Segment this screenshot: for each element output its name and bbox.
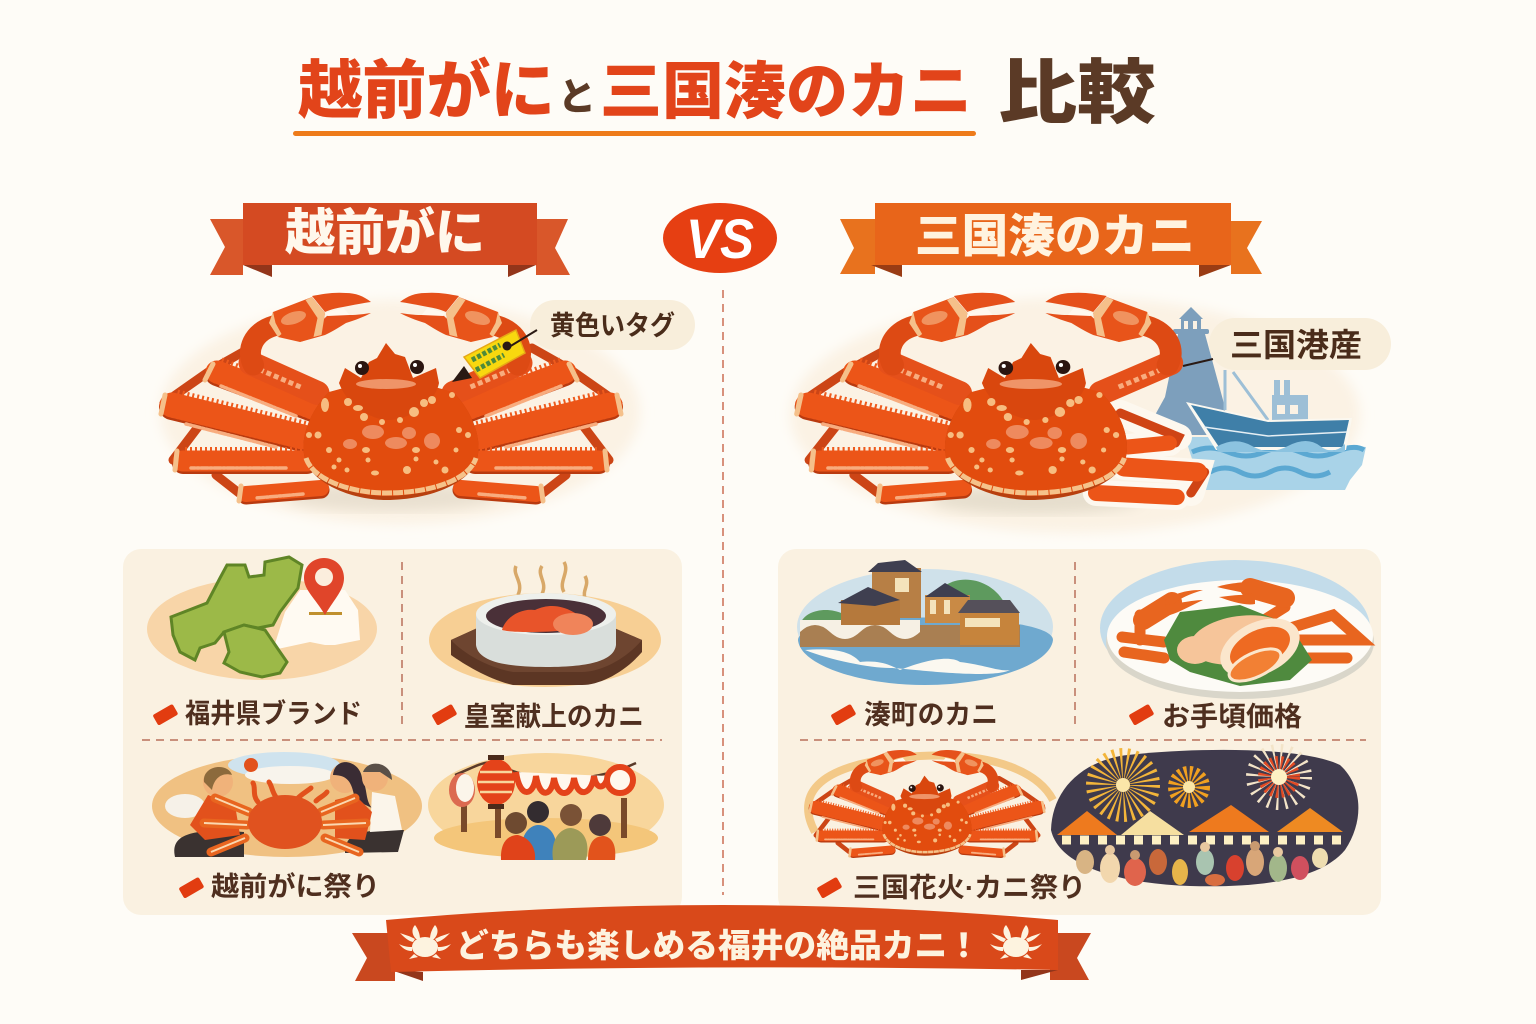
callout: 三国港産: 三国港産 — [1230, 327, 1362, 363]
ribbon: 越前がに — [210, 203, 570, 277]
ribbon: 三国湊のカニ — [840, 203, 1262, 277]
panel: 越前がに features — [123, 549, 682, 915]
illustration: fireworks and stalls — [1051, 750, 1358, 886]
ribbon: 越前がに: 越前がに — [285, 205, 485, 261]
icon: yellow tag — [452, 330, 525, 382]
label: 湊町のカニ: 湊町のカニ — [864, 700, 998, 730]
illustration: 越前がに crab with yellow tag — [160, 293, 695, 524]
illustration: festival lanterns and crowd — [428, 753, 664, 860]
title — [293, 54, 1156, 136]
bottom banner — [352, 905, 1091, 981]
illustration: people around a crab — [152, 752, 422, 857]
illustration: Fukui map with pin — [147, 557, 377, 680]
icon: crab right — [990, 925, 1042, 959]
bottom banner: どちらも楽しめる福井の絶品カニ！ — [456, 927, 980, 964]
crab — [204, 782, 366, 852]
title: 比較 — [998, 54, 1156, 132]
crab — [161, 293, 621, 501]
fishing boat — [1186, 370, 1352, 452]
ribbon: 三国湊のカニ: 三国湊のカニ — [915, 210, 1195, 262]
label: お手頃価格: お手頃価格 — [1162, 702, 1302, 732]
title: と — [558, 77, 596, 119]
crab — [797, 293, 1204, 501]
label: 福井県ブランド: 福井県ブランド — [185, 698, 362, 729]
VS badge — [663, 203, 777, 273]
illustration: festival crab — [808, 750, 1053, 856]
VS badge: VS — [686, 207, 754, 270]
title: 三国湊のカニ — [600, 58, 972, 127]
illustration: steaming crab dish — [429, 562, 661, 687]
label: 三国花火·カニ祭り: 三国花火·カニ祭り — [853, 873, 1086, 903]
illustration: crab platter — [1100, 560, 1374, 699]
title: 越前がに — [298, 55, 555, 127]
callout: 黄色いタグ: 黄色いタグ — [550, 310, 675, 341]
sea — [1185, 437, 1366, 490]
lighthouse — [1144, 307, 1230, 435]
label: 越前がに祭り: 越前がに祭り — [211, 871, 380, 902]
callout: 黄色いタグ — [509, 300, 695, 350]
callout: 三国港産 — [1183, 318, 1391, 370]
label: 皇室献上のカニ: 皇室献上のカニ — [464, 702, 644, 732]
icon: crab left — [399, 925, 451, 959]
panel: 三国湊のカニ features — [778, 549, 1381, 915]
illustration: harbour town — [797, 560, 1053, 685]
illustration: 三国湊 crab with lighthouse and boat — [790, 293, 1391, 533]
